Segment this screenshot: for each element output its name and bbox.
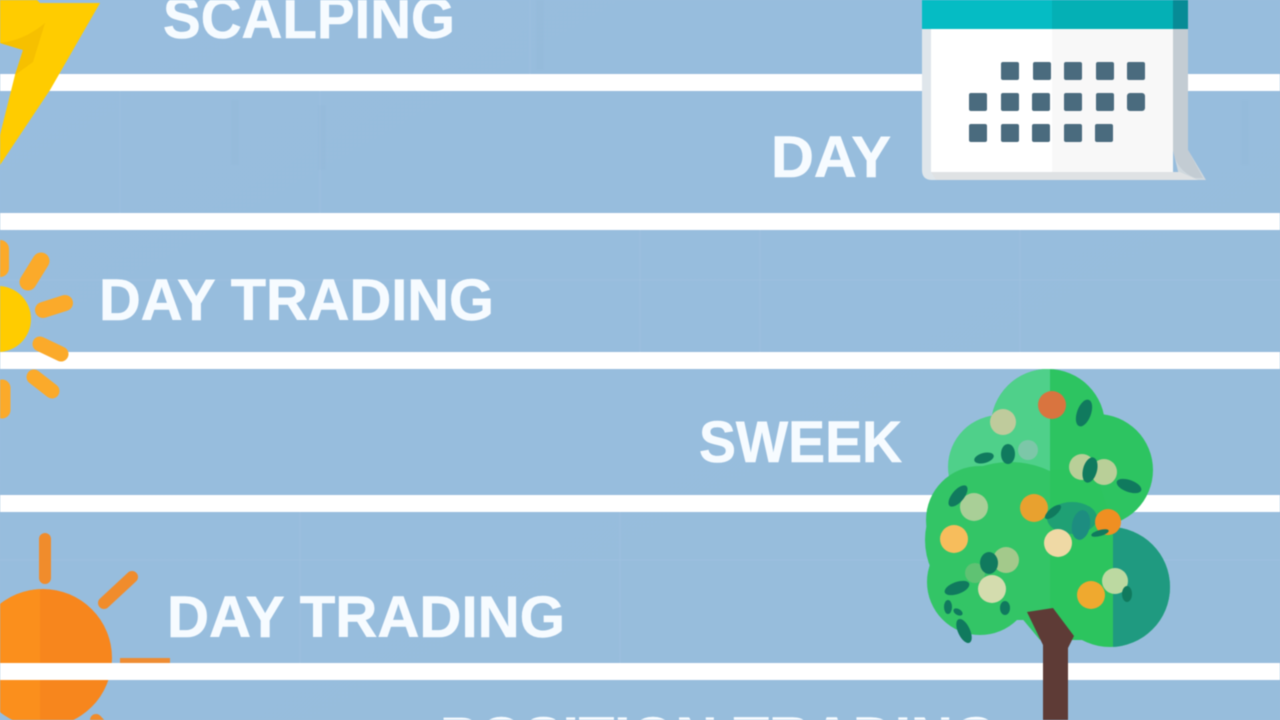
heading: day trading (second): DAY TRADING (167, 585, 565, 650)
icon: calendar (922, 0, 1206, 180)
fruit (940, 391, 1128, 609)
label: day: DAY (771, 125, 891, 190)
leaves (943, 397, 1143, 645)
tree trunk (1027, 608, 1074, 720)
icon: lightning bolt (0, 0, 100, 165)
label: sweek: SWEEK (699, 410, 902, 475)
tree canopy (925, 369, 1170, 647)
heading: day trading: DAY TRADING (99, 268, 494, 333)
icon: orange sun (0, 539, 170, 720)
icon: yellow sun (0, 249, 65, 410)
icon: money tree (925, 369, 1170, 720)
calendar day grid (969, 62, 1145, 142)
